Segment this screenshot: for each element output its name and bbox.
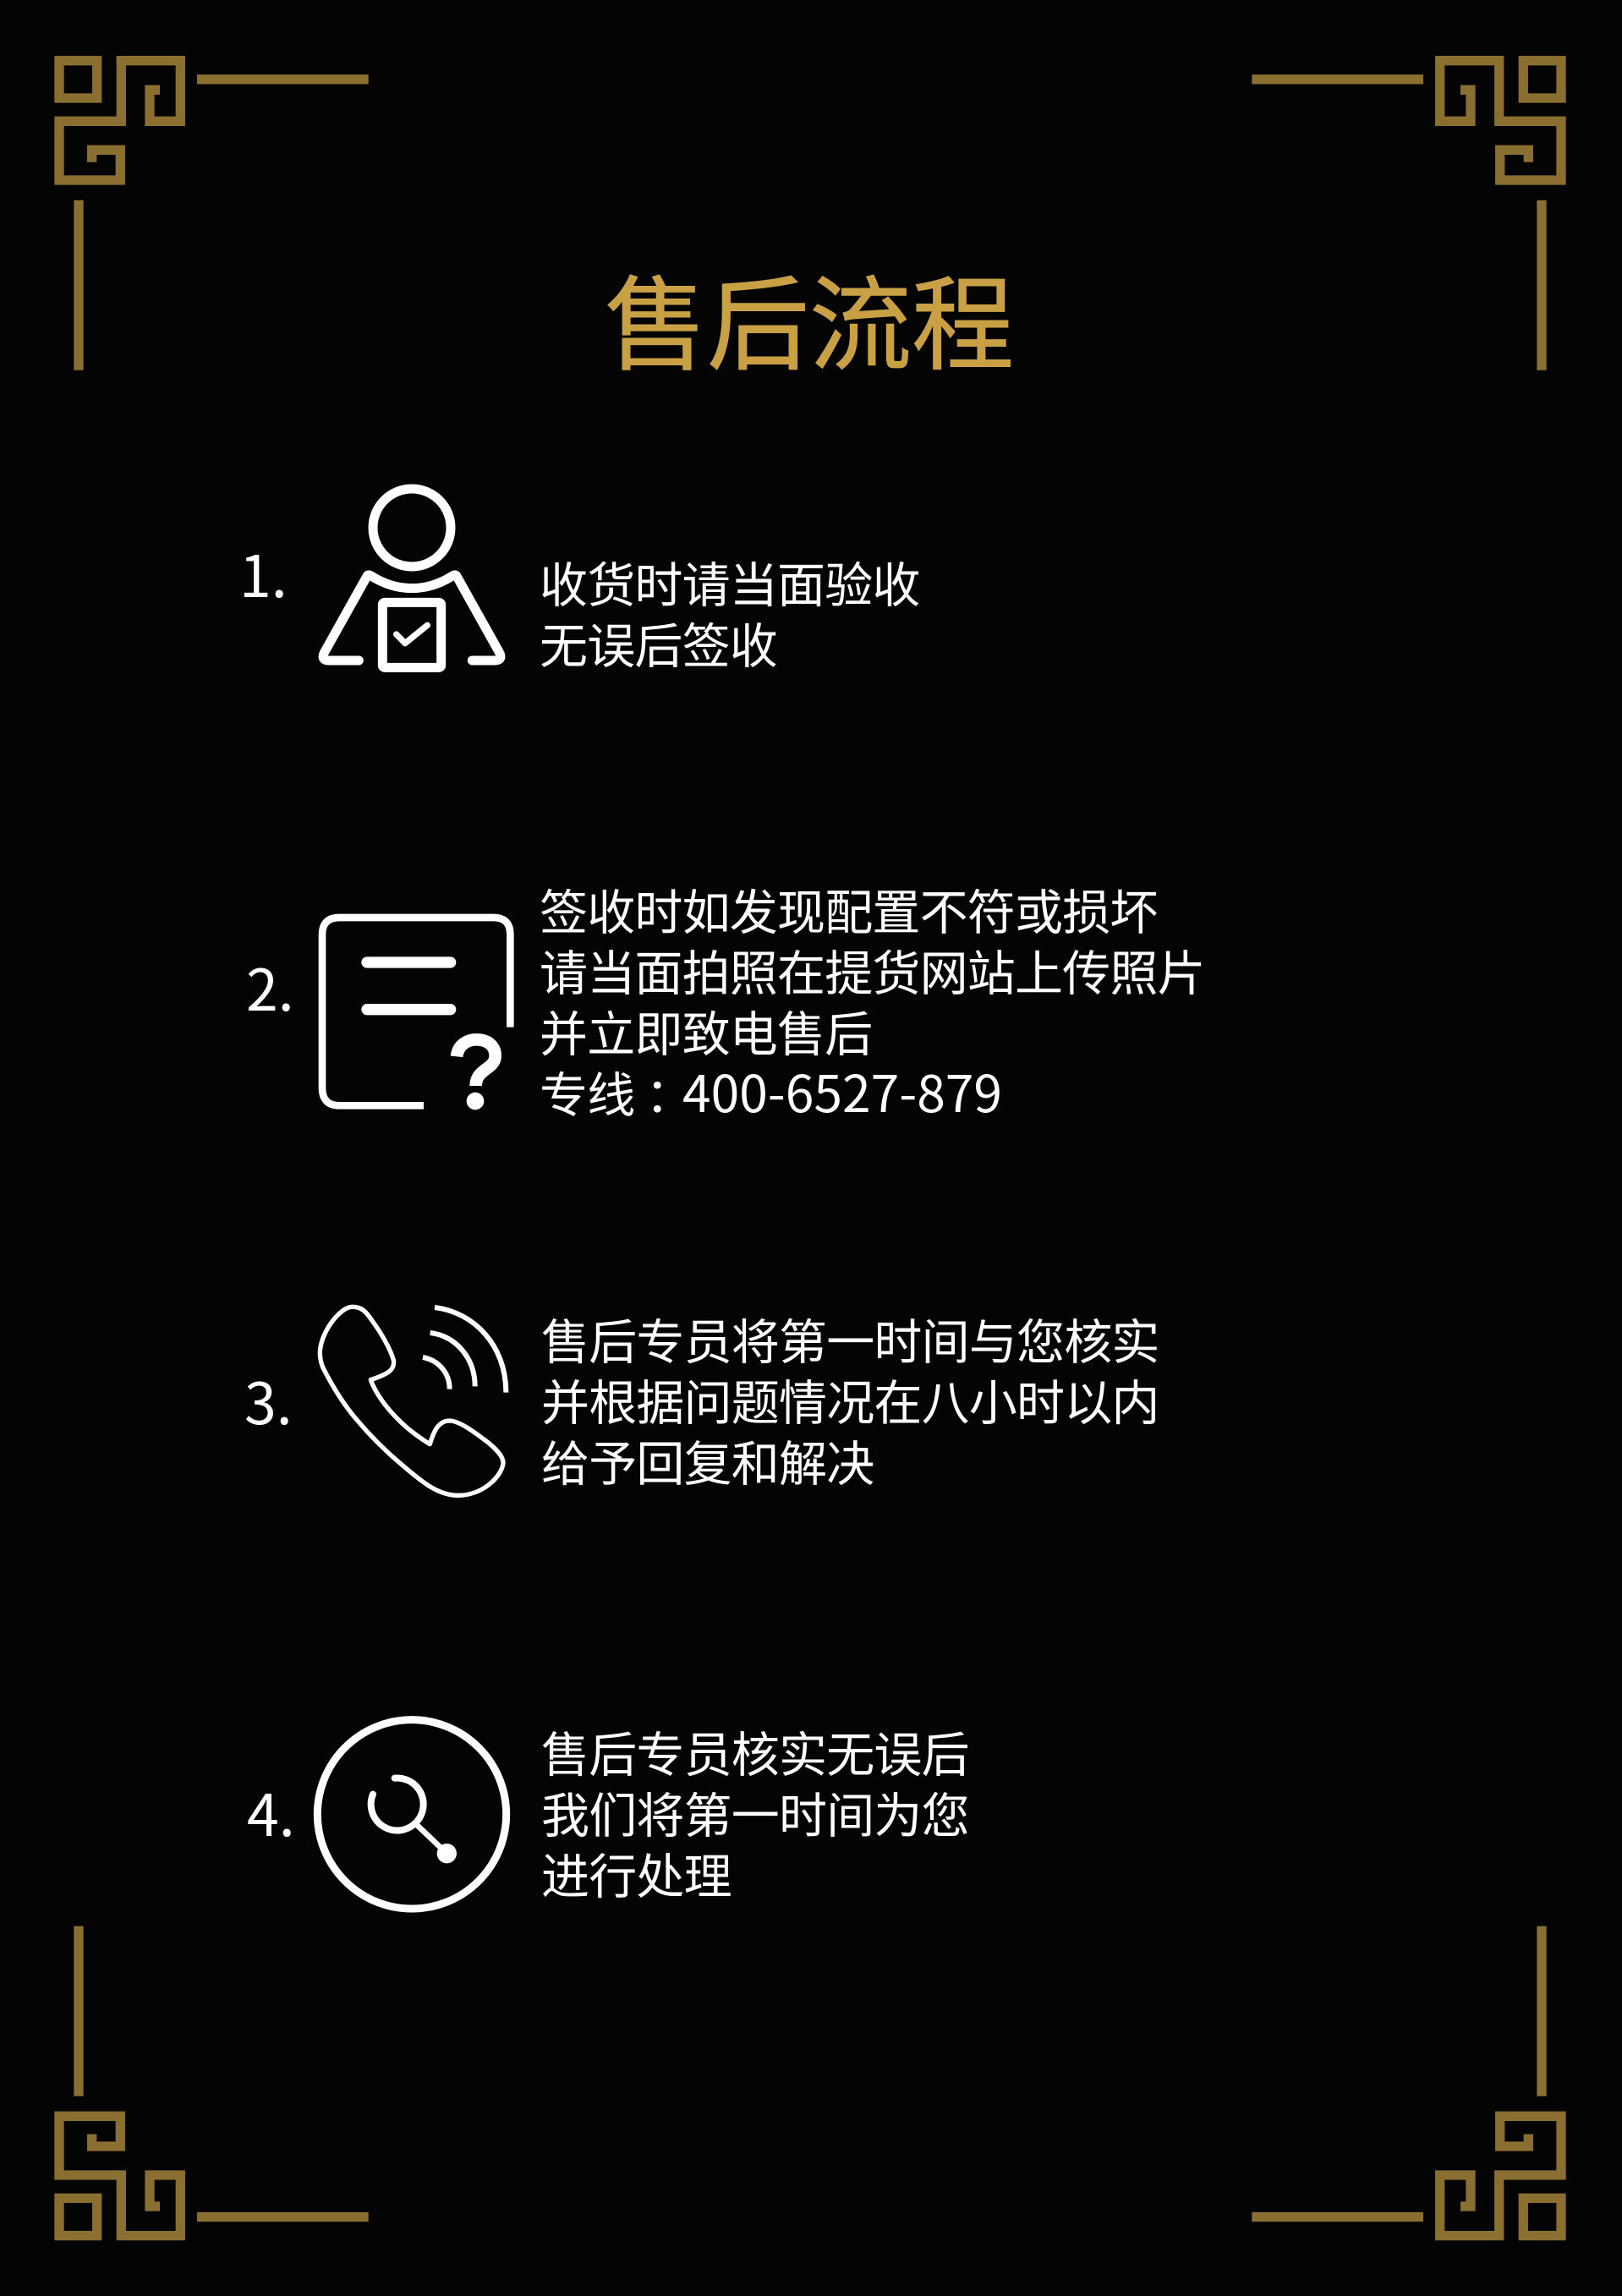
icon: person with checklist xyxy=(323,489,501,667)
ornament: top-right corner xyxy=(1252,61,1561,370)
step 3 text xyxy=(541,1316,1159,1492)
icon: magnifier in circle xyxy=(317,1720,507,1909)
step 4 text: 我们将第一时间为您 xyxy=(541,1789,969,1844)
ornament: bottom-right corner xyxy=(1252,1926,1561,2236)
step 1 text: 无误后签收 xyxy=(540,620,777,674)
step 2 text: 400-6527-879 xyxy=(682,1054,1002,1127)
step 3 text: 给予回复和解决 xyxy=(541,1438,874,1492)
step 4 text: 售后专员核实无误后 xyxy=(541,1729,969,1783)
icon: telephone with signal waves xyxy=(320,1307,506,1495)
step 3 text: 并根据问题情况在八小时以内 xyxy=(541,1377,1159,1431)
step 2 text: 专线 xyxy=(540,1069,634,1123)
step 2 text: ： xyxy=(645,1069,693,1123)
step 3 text: 售后专员将第一时间与您核实 xyxy=(541,1316,1159,1370)
step 2 text xyxy=(540,886,1205,1127)
icon: document with question mark xyxy=(322,918,510,1110)
step 4 text: 进行处理 xyxy=(541,1850,732,1904)
step 2 number: 2. xyxy=(246,944,294,1027)
step 4 text xyxy=(541,1729,969,1904)
title: 售后流程 xyxy=(605,268,1014,383)
step 2 text: 签收时如发现配置不符或损坏 xyxy=(540,886,1158,940)
step 1 text: 收货时请当面验收 xyxy=(540,559,920,613)
ornament: top-left corner xyxy=(59,61,369,370)
step 2 text: 请当面拍照在提货网站上传照片 xyxy=(540,947,1205,1001)
step 2 text: 并立即致电售后 xyxy=(540,1008,872,1062)
step 1 number: 1. xyxy=(239,530,288,614)
step 1 text xyxy=(540,559,920,674)
step 3 number: 3. xyxy=(244,1357,293,1441)
ornament: bottom-left corner xyxy=(59,1926,369,2236)
step 4 number: 4. xyxy=(247,1769,295,1853)
